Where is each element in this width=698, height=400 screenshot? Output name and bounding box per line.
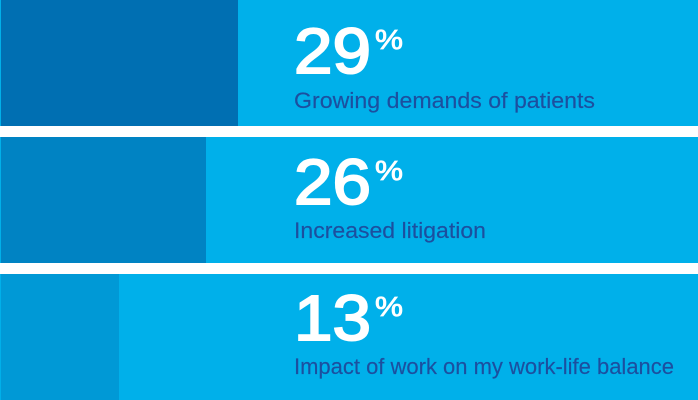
number: 26%: %	[375, 155, 403, 186]
number: 13%: %	[375, 291, 403, 322]
number: 13%	[294, 282, 403, 354]
bar: 13 percent	[1, 274, 119, 400]
number: 29%: %	[375, 24, 403, 55]
label: increased litigation: Increased litigation	[294, 218, 486, 243]
panel: increased litigation	[0, 137, 698, 263]
panel: impact of work on work-life balance	[0, 274, 698, 400]
label: impact of work on my work-life balance: Impact of work on my work-life balance	[294, 354, 674, 379]
panel: growing demands of patients	[0, 0, 698, 126]
number: 26%	[294, 146, 403, 218]
bar: 26 percent	[1, 137, 206, 263]
label: growing demands of patients: Growing demands of patients	[294, 88, 595, 113]
number: 29%: 29	[294, 15, 371, 87]
number: 26%: 26	[294, 146, 371, 218]
number: 13%: 13	[294, 282, 371, 354]
number: 29%	[294, 15, 403, 87]
bar: 29 percent	[1, 0, 238, 126]
